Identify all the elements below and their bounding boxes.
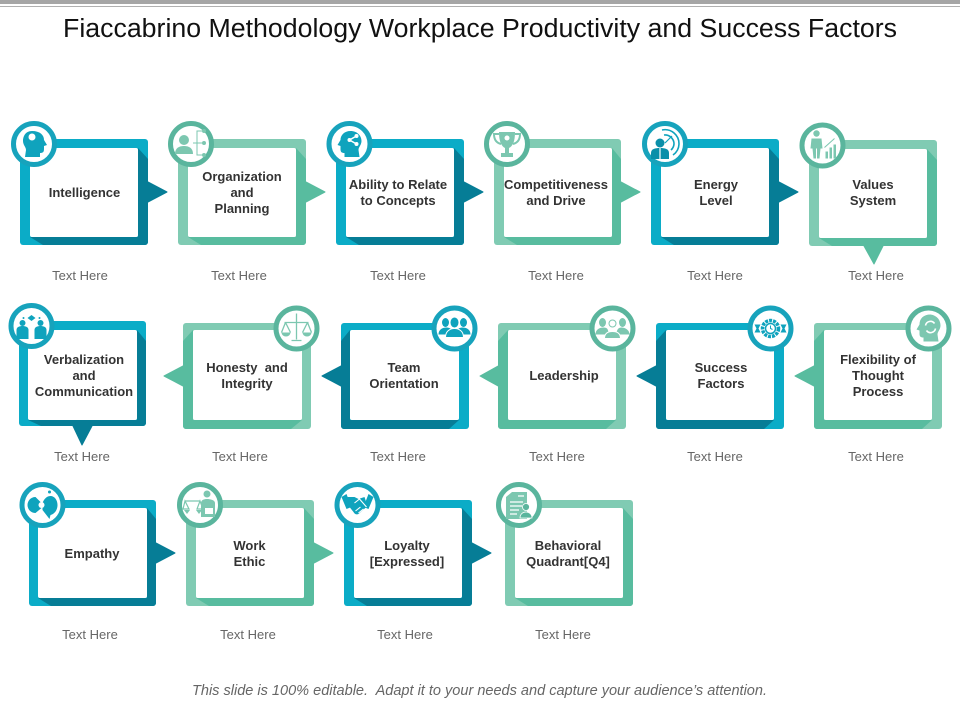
card: Verbalization and Communication [11, 306, 146, 464]
card frame [322, 323, 469, 429]
card: Team Orientation [322, 308, 475, 464]
card frame [164, 323, 311, 429]
card: Flexibility of Thought Process [795, 308, 949, 464]
card: Loyalty [Expressed] [337, 484, 491, 642]
icon: head with cycle arrows [908, 308, 949, 349]
card heading: Ability to Relate [349, 177, 447, 192]
card frame [19, 321, 146, 445]
card frame [651, 139, 798, 245]
card heading: Thought [852, 368, 905, 383]
icon: person with org tree [170, 124, 212, 164]
icon: two heads with puzzle pieces [22, 484, 63, 526]
icon: trophy [486, 124, 528, 164]
card frame [178, 139, 325, 245]
caption: Text Here [212, 449, 268, 464]
card heading: Behavioral [535, 538, 601, 553]
caption: Text Here [370, 449, 426, 464]
card heading: Integrity [221, 376, 273, 391]
caption: Text Here [528, 268, 584, 283]
icon: scales of justice [276, 308, 317, 349]
card: Organization and Planning [170, 124, 325, 283]
caption: Text Here [52, 268, 108, 283]
card heading: and [72, 368, 96, 383]
card heading: Energy [694, 177, 738, 192]
card: Work Ethic [180, 484, 333, 642]
card heading: Process [853, 384, 903, 399]
icon: person with gauge [644, 124, 686, 164]
card heading: and Drive [526, 193, 586, 208]
footer note: This slide is 100% editable. Adapt it to your needs and capture your audience’s attention. [192, 683, 767, 699]
card heading: Communication [35, 384, 133, 399]
card frame [637, 323, 784, 429]
card heading: to Concepts [360, 193, 436, 208]
icon: team of three [434, 308, 475, 349]
icon: leader with team [592, 308, 633, 349]
card heading: Intelligence [49, 185, 120, 200]
card: Leadership [480, 308, 633, 464]
caption: Text Here [54, 449, 110, 464]
icon: handshake [337, 484, 378, 526]
card: Honesty and Integrity [164, 308, 317, 464]
caption: Text Here [848, 268, 904, 283]
caption: Text Here [529, 449, 585, 464]
caption: Text Here [370, 268, 426, 283]
icon: gear with ribbon [750, 308, 791, 349]
card: Competitiveness and Drive [486, 124, 640, 283]
card heading: Loyalty [384, 538, 430, 553]
caption: Text Here [220, 627, 276, 642]
card heading: Success [695, 360, 747, 375]
card heading: Ethic [234, 554, 265, 569]
card heading: Level [699, 193, 733, 208]
icon: head with bulb [14, 124, 54, 164]
card heading: Orientation [369, 376, 439, 391]
card: Success Factors [637, 308, 791, 464]
card heading: Verbalization [44, 352, 124, 367]
caption: Text Here [687, 449, 743, 464]
icon: scales and worker [180, 484, 220, 526]
card frame [344, 500, 491, 606]
title: Fiaccabrino Methodology Workplace Productivity and Success Factors [63, 15, 897, 43]
caption: Text Here [535, 627, 591, 642]
card frame [186, 500, 333, 606]
card: Behavioral Quadrant[Q4] [498, 484, 633, 642]
card heading: Empathy [65, 546, 120, 561]
caption: Text Here [62, 627, 118, 642]
icon: two people talking [11, 306, 52, 346]
card: Energy Level [644, 124, 798, 283]
card frame [29, 500, 175, 606]
card heading: and [230, 185, 254, 200]
card frame [480, 323, 626, 429]
card: Ability to Relate to Concepts [329, 124, 483, 283]
card heading: Organization [202, 169, 282, 184]
caption: Text Here [687, 268, 743, 283]
card heading: Planning [215, 201, 270, 216]
card frame [336, 139, 483, 245]
card frame [795, 323, 942, 429]
icon: businessman with growth bars [802, 125, 843, 166]
icon: document with person [498, 484, 540, 526]
card frame [809, 140, 937, 264]
caption: Text Here [377, 627, 433, 642]
card heading: Flexibility of [840, 352, 916, 367]
card heading: Work [233, 538, 266, 553]
card heading: Quadrant[Q4] [526, 554, 610, 569]
card heading: Team [388, 360, 420, 375]
card frame [494, 139, 640, 245]
card: Values System [802, 125, 937, 283]
caption: Text Here [211, 268, 267, 283]
card heading: Honesty and [206, 360, 288, 375]
card frame [20, 139, 167, 245]
card heading: [Expressed] [370, 554, 444, 569]
card: Empathy [22, 484, 175, 642]
icon: head with share symbol [329, 124, 370, 164]
card heading: Competitiveness [504, 177, 608, 192]
card heading: Values [852, 177, 894, 192]
caption: Text Here [848, 449, 904, 464]
card heading: System [850, 193, 896, 208]
card: Intelligence [14, 124, 167, 283]
card frame [505, 500, 633, 606]
card heading: Leadership [529, 368, 599, 383]
card heading: Factors [698, 376, 744, 391]
